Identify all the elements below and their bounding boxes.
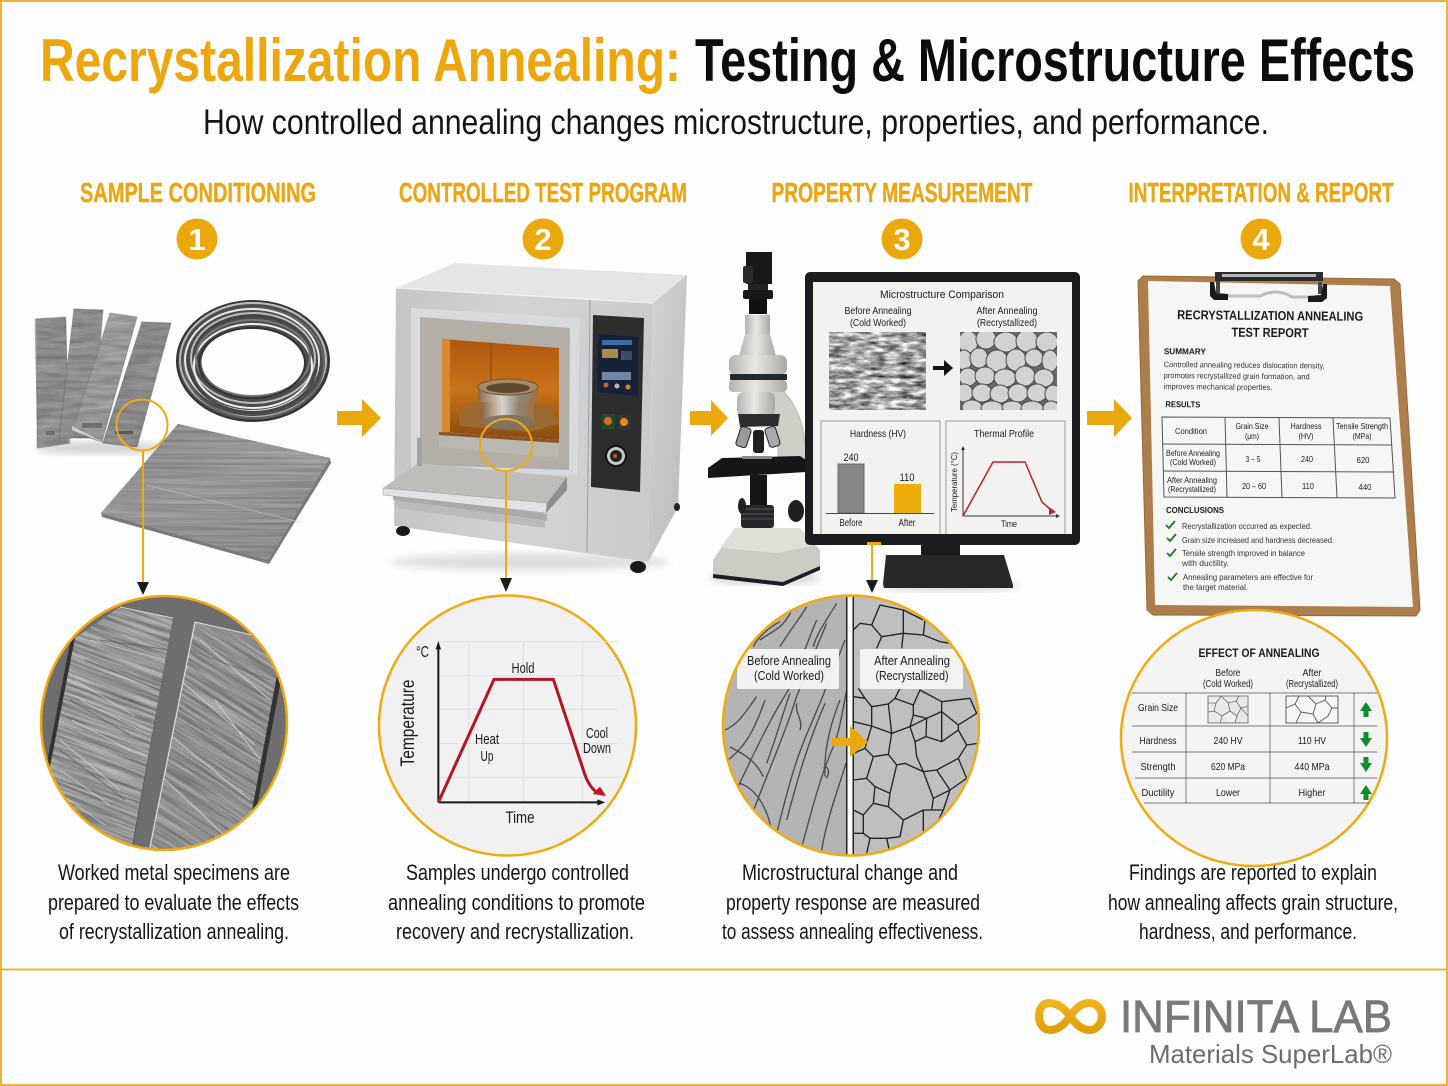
microscope arm — [752, 385, 805, 462]
before micrograph — [829, 332, 926, 410]
column headers: Before — [1216, 668, 1241, 679]
caption step 4: hardness, and performance. — [1139, 919, 1357, 944]
chart labels: Cool — [586, 725, 608, 742]
chart labels: Temperature — [398, 680, 419, 766]
summary: improves mechanical properties. — [1164, 382, 1273, 392]
recrystallized grains — [853, 605, 978, 853]
results label: RESULTS — [1165, 399, 1201, 409]
caption step 2: recovery and recrystallization. — [396, 919, 634, 944]
after label card — [860, 649, 963, 689]
results table: Before Annealing — [1166, 449, 1220, 458]
before label card: Before Annealing — [747, 653, 831, 668]
conclusions: Tensile strength improved in balance — [1182, 549, 1305, 558]
results table: (µm) — [1245, 431, 1259, 441]
number badge 2 — [522, 218, 564, 260]
report title — [1177, 307, 1363, 341]
values: 440 MPa — [1294, 762, 1330, 773]
caption step 1: prepared to evaluate the effects — [48, 890, 299, 915]
leader line with arrow to zoom circle — [137, 451, 149, 595]
thermal profile chart: Thermal Profile — [974, 428, 1034, 440]
number badge 2: 2 — [534, 222, 552, 257]
chart labels — [398, 644, 611, 827]
caption step 1: Worked metal specimens are — [58, 860, 290, 885]
microscope base — [713, 528, 820, 586]
caption step 1 — [48, 860, 299, 944]
cold worked grains — [723, 603, 847, 853]
clipboard board — [1138, 276, 1420, 616]
report title: RECRYSTALLIZATION ANNEALING — [1177, 307, 1363, 324]
chart labels: °C — [416, 644, 429, 661]
number badge 3: 3 — [893, 222, 911, 257]
number badge 4: 4 — [1252, 222, 1270, 257]
thermal profile chart — [946, 421, 1065, 536]
footer divider — [1, 968, 1447, 970]
summary — [1164, 346, 1325, 392]
caption step 4 — [1108, 860, 1398, 944]
icon: microscope — [708, 252, 821, 586]
divider — [846, 594, 854, 858]
clipboard report — [1138, 272, 1420, 616]
column headers — [1203, 668, 1338, 690]
icon: monitor with results — [805, 272, 1080, 593]
eyepiece — [743, 252, 773, 314]
before-to-after arrow — [832, 726, 868, 757]
results table: 20 – 60 — [1242, 481, 1266, 491]
icon: infinity mark — [1039, 1003, 1102, 1030]
summary: promotes recrystallized grain formation, and — [1164, 371, 1310, 381]
screen title: Microstructure Comparison — [880, 289, 1004, 301]
chart labels: Time — [506, 808, 534, 827]
logo tagline: Materials SuperLab® — [1149, 1039, 1392, 1069]
heading: sample conditioning: SAMPLE CONDITIONING — [80, 177, 316, 208]
caption step 3 — [722, 860, 983, 944]
zoom circle 2: thermal cycle chart — [379, 596, 636, 856]
caption step 1: of recrystallization annealing. — [59, 919, 289, 944]
results table: 110 — [1302, 481, 1314, 491]
number badge 4 — [1240, 218, 1282, 260]
results table: Condition — [1175, 426, 1207, 436]
conclusions — [1166, 505, 1334, 592]
results table: 440 — [1358, 482, 1372, 492]
summary: Controlled annealing reduces dislocation density, — [1164, 360, 1325, 370]
hardness chart — [821, 421, 940, 536]
leader line with arrow to chart circle — [500, 471, 512, 592]
green trend arrows — [1360, 702, 1372, 800]
caption step 3: Microstructural change and — [742, 860, 958, 885]
after micrograph — [955, 329, 1061, 415]
hardness chart: 240 — [844, 452, 858, 464]
row labels: Hardness — [1140, 736, 1176, 747]
hardness chart: Before — [840, 517, 863, 529]
after label — [976, 305, 1038, 329]
results table: Hardness — [1290, 421, 1322, 431]
before label card — [737, 649, 839, 689]
caption step 2 — [388, 860, 645, 944]
row labels: Ductility — [1142, 788, 1174, 799]
values: 620 MPa — [1211, 762, 1245, 773]
conclusions: the target material. — [1183, 583, 1248, 592]
caption step 3: to assess annealing effectiveness. — [722, 919, 983, 944]
chart labels: Heat — [475, 731, 500, 748]
before label: Before Annealing — [844, 305, 912, 317]
results table: 240 — [1301, 454, 1313, 464]
number badge 1: 1 — [188, 222, 206, 257]
values: 240 HV — [1214, 736, 1243, 747]
microscope head — [729, 315, 787, 416]
zoom circle 3: microstructure before and after — [720, 594, 982, 858]
arrow: step 2 to 3 — [690, 400, 728, 436]
arrow: step 1 to 2 — [337, 399, 381, 437]
caption step 2: Samples undergo controlled — [406, 860, 629, 885]
after label card: (Recrystallized) — [876, 668, 948, 683]
before label: (Cold Worked) — [850, 317, 906, 329]
conclusions: with ductility. — [1181, 559, 1229, 568]
results table: After Annealing — [1167, 476, 1217, 485]
values: Lower — [1216, 788, 1241, 799]
after label: (Recrystallized) — [977, 317, 1037, 329]
magnifier ring on crucible tray — [480, 419, 532, 471]
report text — [1163, 307, 1363, 411]
heading: controlled test program: CONTROLLED TEST PROGRAM — [399, 177, 687, 208]
title: Recrystallization Annealing: — [40, 27, 681, 94]
microscope column and focus knob — [738, 475, 804, 528]
results table: (Recrystallized) — [1168, 485, 1216, 494]
chart plot — [436, 641, 618, 805]
right specimen strip — [150, 622, 277, 849]
heading: property measurement: PROPERTY MEASUREMENT — [772, 177, 1032, 208]
column headers: (Cold Worked) — [1203, 679, 1253, 690]
microscope stage — [708, 456, 806, 478]
row labels: Strength — [1140, 762, 1176, 773]
conclusions: Grain size increased and hardness decreased. — [1182, 536, 1334, 545]
leader line with arrow to micro circle — [866, 542, 881, 593]
arrow: step 3 to 4 — [1087, 399, 1132, 437]
grain thumbnail after — [1286, 696, 1338, 723]
hardness chart: After — [898, 517, 916, 529]
logo wordmark: INFINITA LAB — [1120, 991, 1392, 1042]
caption step 2: annealing conditions to promote — [388, 890, 645, 915]
values — [1211, 736, 1330, 799]
results table: (MPa) — [1352, 431, 1372, 441]
micrograph arrow — [933, 360, 953, 376]
left specimen strip — [50, 608, 173, 844]
row labels — [1138, 703, 1178, 799]
column headers: (Recrystallized) — [1286, 679, 1338, 690]
results table — [1162, 417, 1395, 498]
furnace chamber — [420, 317, 570, 470]
chart labels: Hold — [512, 660, 534, 677]
step headings and numbers — [80, 177, 1394, 260]
hardness chart: Hardness (HV) — [850, 428, 906, 440]
caption step 4: Findings are reported to explain — [1129, 860, 1377, 885]
column headers: After — [1302, 668, 1322, 679]
before label — [844, 305, 912, 329]
report paper — [1148, 281, 1413, 607]
after label card: After Annealing — [874, 653, 950, 668]
conclusions: Annealing parameters are effective for — [1183, 573, 1313, 582]
report title: TEST REPORT — [1231, 325, 1309, 340]
results table: 3 – 5 — [1246, 454, 1261, 464]
number badge 1 — [176, 218, 218, 260]
monitor bezel — [805, 272, 1080, 545]
wire coil — [177, 301, 329, 421]
values: 110 HV — [1298, 736, 1326, 747]
zoom circle 4: effect of annealing table — [1121, 610, 1387, 866]
results table: (HV) — [1298, 431, 1314, 441]
monitor stand — [880, 545, 1020, 591]
hardness chart: 110 — [900, 472, 914, 484]
results table: Tensile Strength — [1336, 421, 1388, 431]
metal plate — [101, 424, 331, 564]
furnace door — [383, 438, 567, 528]
subtitle: How controlled annealing changes microstructure, properties, and performance. — [203, 103, 1269, 142]
values: Higher — [1298, 788, 1326, 799]
number badge 3 — [882, 218, 922, 260]
results table: 620 — [1356, 455, 1370, 465]
magnifier ring on strip — [116, 400, 168, 450]
objective turret — [735, 414, 781, 453]
logo — [1039, 991, 1392, 1069]
conclusions: CONCLUSIONS — [1166, 505, 1224, 515]
monitor screen — [813, 282, 1072, 537]
metal strips — [34, 309, 171, 454]
metal clip — [1210, 272, 1327, 302]
summary: SUMMARY — [1164, 346, 1206, 356]
control panel — [591, 315, 644, 492]
table grid — [1132, 693, 1377, 803]
thermal profile chart: Time — [1001, 519, 1017, 530]
row labels: Grain Size — [1138, 703, 1178, 714]
circle table title: EFFECT OF ANNEALING — [1198, 646, 1320, 660]
chart labels: Up — [480, 748, 494, 765]
thermal profile chart: Temperature (°C) — [949, 452, 959, 512]
results table: (Cold Worked) — [1170, 458, 1216, 467]
before label card: (Cold Worked) — [754, 668, 824, 683]
after label: After Annealing — [976, 305, 1038, 317]
icon: metal specimens — [34, 301, 331, 595]
furnace body — [394, 263, 687, 573]
results table: Grain Size — [1236, 421, 1269, 431]
title — [40, 27, 1415, 94]
icon: annealing furnace — [383, 263, 687, 592]
caption step 3: property response are measured — [726, 890, 980, 915]
zoom circle 1: worked metal surface — [40, 594, 288, 852]
conclusions: Recrystallization occurred as expected. — [1182, 522, 1312, 531]
check marks — [1166, 521, 1177, 580]
grain thumbnail before — [1208, 696, 1248, 723]
chart labels: Down — [583, 740, 611, 757]
